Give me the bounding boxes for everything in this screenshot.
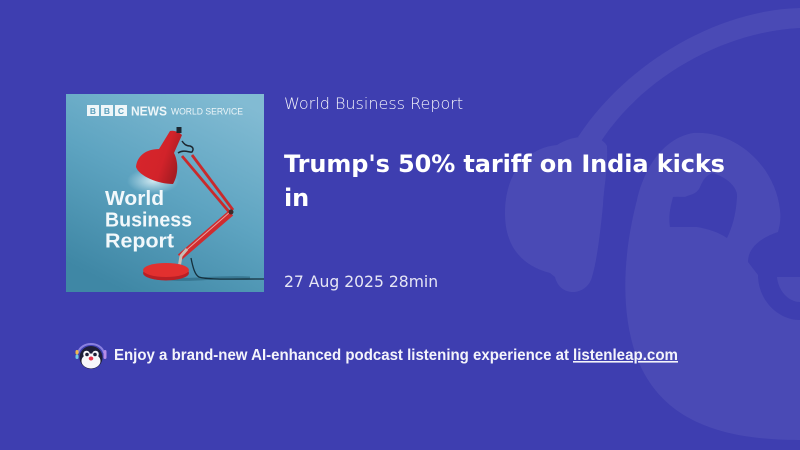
cover title: Report [105, 230, 174, 252]
promo line: Enjoy a brand-new AI-enhanced podcast listening experience at [114, 347, 570, 364]
BBC News World Service logo: B [90, 106, 96, 116]
episode title: Trump's 50% tariff on India kicks in [284, 150, 725, 212]
cover title: Business [105, 210, 192, 232]
BBC News World Service logo: WORLD SERVICE [171, 106, 243, 118]
cover title: World [105, 188, 164, 210]
cover title [105, 188, 192, 252]
icon: penguin with headphones [76, 343, 106, 369]
red desk lamp [136, 127, 264, 280]
podcast cover art [66, 94, 264, 292]
promo line: listenleap.com [573, 347, 678, 364]
date and duration: 27 Aug 2025 28min [284, 273, 438, 291]
BBC News World Service logo [87, 104, 243, 118]
podcast show name: World Business Report [284, 94, 463, 113]
BBC News World Service logo: C [118, 106, 124, 116]
BBC News World Service logo: NEWS [131, 104, 167, 118]
BBC News World Service logo: B [104, 106, 110, 116]
